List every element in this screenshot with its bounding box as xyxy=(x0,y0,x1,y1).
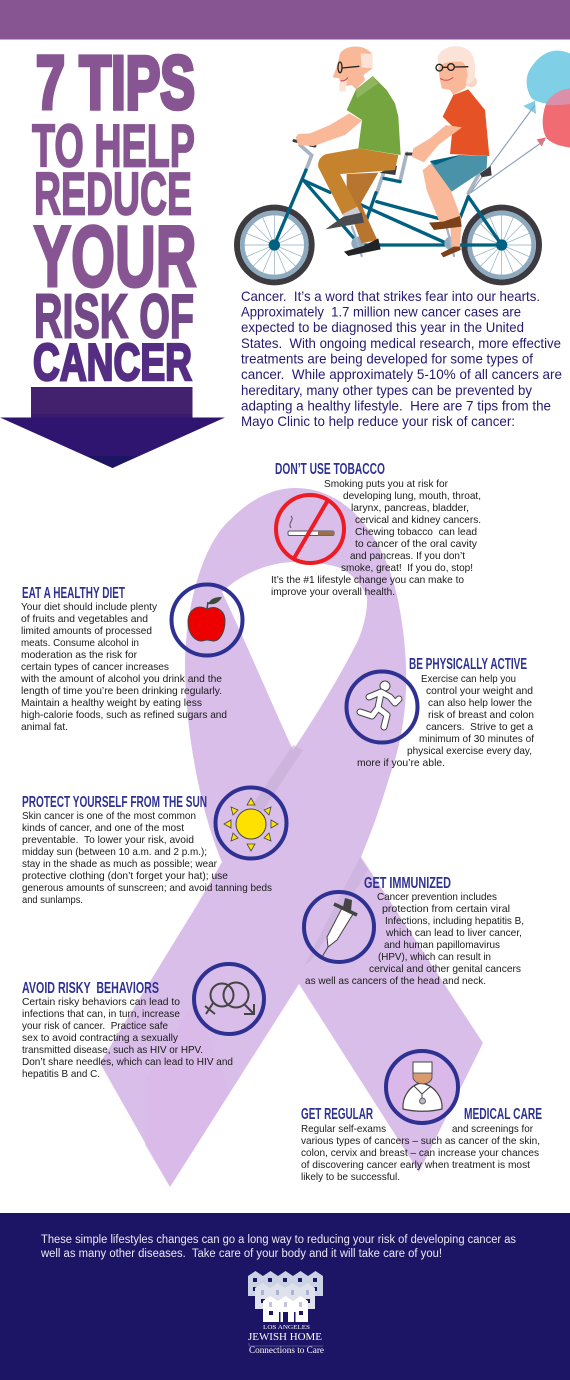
logo: Los Angeles Jewish Home xyxy=(248,1271,324,1355)
title block: TO HELP xyxy=(32,112,195,180)
title block: 7 TIPS xyxy=(36,40,195,124)
title block: YOUR xyxy=(34,209,196,305)
tip: be physically active: physical exercise every day, xyxy=(407,745,532,757)
illustration: couple on tandem bicycle with balloons xyxy=(237,46,570,282)
tip: protect yourself from the sun: stay in the shade as much as possible; wear xyxy=(22,858,217,870)
bicycle frame xyxy=(269,141,507,256)
tip: eat a healthy diet: Your diet should include plenty xyxy=(21,601,158,613)
icon: no smoking sign xyxy=(276,495,344,563)
awareness ribbon xyxy=(100,488,483,1187)
tip: protect yourself from the sun: preventable. To lower your risk, avoid xyxy=(22,834,194,846)
tip: don't use tobacco: and pancreas. If you don’t xyxy=(350,550,465,562)
woman rider xyxy=(412,46,489,257)
tip: be physically active: control your weight and xyxy=(426,685,533,697)
tip: don't use tobacco: developing lung, mouth, throat, xyxy=(343,490,481,502)
tip: be physically active: more if you’re able. xyxy=(357,757,445,769)
intro paragraph: hereditary, many other types can be prevented by xyxy=(241,382,532,398)
tip: protect yourself from the sun: kinds of cancer, and one of the most xyxy=(22,822,184,834)
tip: avoid risky behaviors: hepatitis B and C. xyxy=(22,1068,100,1080)
arrow pointing down xyxy=(0,387,225,468)
intro paragraph: Approximately 1.7 million new cancer cases are xyxy=(241,304,521,320)
wheels xyxy=(237,208,539,282)
tip: eat a healthy diet: high-calorie foods, such as refined sugars and xyxy=(21,709,227,721)
tip: get immunized: protection from certain viral xyxy=(382,903,510,915)
balloons xyxy=(470,51,570,193)
tip: avoid risky behaviors: AVOID RISKY BEHAVIORS xyxy=(22,980,159,997)
logo: Los Angeles Jewish Home: LOS ANGELES xyxy=(263,1324,310,1331)
tip: be physically active: risk of breast and colon xyxy=(428,709,534,721)
icon: apple xyxy=(172,584,242,656)
tip: get regular medical care: of discovering cancer early when treatment is most xyxy=(301,1159,530,1171)
icon: sun xyxy=(216,788,286,858)
tip: eat a healthy diet: EAT A HEALTHY DIET xyxy=(22,585,125,602)
tip: be physically active xyxy=(346,656,534,769)
footer message: These simple lifestyles changes can go a long way to reducing your risk of developing cancer as xyxy=(41,1234,516,1246)
tip: avoid risky behaviors: infections that can, in turn, increase xyxy=(22,1008,180,1020)
footer message xyxy=(40,1234,516,1260)
tip: eat a healthy diet xyxy=(20,584,243,733)
tip: get immunized: (HPV), which can result in xyxy=(378,951,491,963)
tip: get immunized: GET IMMUNIZED xyxy=(364,875,451,892)
logo: Los Angeles Jewish Home: Connections to Care xyxy=(249,1345,324,1355)
tip: get immunized: and human papillomavirus xyxy=(384,939,500,951)
tip: avoid risky behaviors: Certain risky behaviors can lead to xyxy=(22,996,180,1008)
tip: protect yourself from the sun: protective clothing (don’t forget your hat); use xyxy=(22,870,228,882)
icon: runner xyxy=(346,672,418,742)
tip: eat a healthy diet: with the amount of alcohol you drink and the xyxy=(20,673,222,685)
icon: gender symbols xyxy=(194,964,264,1034)
logo: Los Angeles Jewish Home: JEWISH HOME xyxy=(248,1332,322,1343)
tip: eat a healthy diet: of fruits and vegetables and xyxy=(21,613,148,625)
tip: get immunized: Infections, including hepatitis B, xyxy=(385,915,524,927)
intro paragraph: cancer. While approximately 5-10% of all cancers are xyxy=(241,366,562,382)
title block xyxy=(32,40,196,392)
tip: don't use tobacco: smoke, great! If you do, stop! xyxy=(341,562,473,574)
tip: avoid risky behaviors: transmitted disease, such as HIV or HPV. xyxy=(22,1044,203,1056)
title block: CANCER xyxy=(33,334,192,392)
tip: get regular medical care: likely to be successful. xyxy=(301,1171,400,1183)
tip: get regular medical care: Regular self-exams xyxy=(301,1123,386,1135)
tip: protect yourself from the sun: midday sun (between 10 a.m. and 2 p.m.); xyxy=(22,846,207,858)
tip: be physically active: cancers. Strive to get a xyxy=(426,721,533,733)
tip: eat a healthy diet: Maintain a healthy weight by eating less xyxy=(21,697,202,709)
tip: protect yourself from the sun: Skin cancer is one of the most common xyxy=(22,810,196,822)
tip: don't use tobacco: to cancer of the oral cavity xyxy=(355,538,478,550)
icon: doctor xyxy=(386,1051,458,1123)
tip: get immunized xyxy=(304,875,524,987)
tip: avoid risky behaviors xyxy=(22,964,264,1080)
intro paragraph: States. With ongoing medical research, more effective xyxy=(241,335,561,351)
tip: get immunized: Cancer prevention includes xyxy=(377,891,497,903)
tip: don't use tobacco: It’s the #1 lifestyle change you can make to xyxy=(271,574,464,586)
tip: eat a healthy diet: length of time you’re been drinking regularly. xyxy=(21,685,222,697)
tip: be physically active: Exercise can help you xyxy=(421,673,516,685)
tip: avoid risky behaviors: your risk of cancer. Practice safe xyxy=(22,1020,168,1032)
intro paragraph xyxy=(241,288,562,429)
tip: protect yourself from the sun xyxy=(22,788,286,906)
tip: get immunized: cervical and other genital cancers xyxy=(369,963,521,975)
footer message: well as many other diseases. Take care of your body and it will take care of you! xyxy=(40,1248,442,1260)
tip: don't use tobacco xyxy=(271,461,481,598)
tip: don't use tobacco: Smoking puts you at risk for xyxy=(324,478,448,490)
intro paragraph: adapting a healthy lifestyle. Here are 7 tips from the xyxy=(241,398,551,414)
icon: syringe xyxy=(304,892,374,962)
tip: eat a healthy diet: moderation as the risk for xyxy=(21,649,137,661)
tip: get immunized: as well as cancers of the head and neck. xyxy=(305,975,486,987)
tip: don't use tobacco: larynx, pancreas, bladder, xyxy=(351,502,469,514)
title block: REDUCE xyxy=(34,160,192,228)
intro paragraph: Mayo Clinic to help reduce your risk of cancer: xyxy=(241,413,515,429)
tip: protect yourself from the sun: generous amounts of sunscreen; and avoid tanning beds xyxy=(22,882,272,894)
tip: get regular medical care: and screenings for xyxy=(452,1123,533,1135)
footer band xyxy=(0,1213,570,1380)
tip: eat a healthy diet: certain types of cancer increases xyxy=(21,661,169,673)
tip: be physically active: minimum of 30 minutes of xyxy=(419,733,534,745)
tip: eat a healthy diet: animal fat. xyxy=(21,721,68,733)
tip: avoid risky behaviors: sex to avoid contracting a sexually xyxy=(22,1032,179,1044)
tip: don't use tobacco: DON’T USE TOBACCO xyxy=(275,461,385,478)
tip: get regular medical care xyxy=(301,1051,542,1183)
tip: get regular medical care: GET REGULAR xyxy=(301,1106,373,1123)
tip: get immunized: which can lead to liver cancer, xyxy=(385,927,522,939)
tip: don't use tobacco: Chewing tobacco can lead xyxy=(355,526,477,538)
tip: avoid risky behaviors: Don’t share needles, which can lead to HIV and xyxy=(22,1056,233,1068)
tip: be physically active: can also help lower the xyxy=(428,697,532,709)
man rider xyxy=(296,46,401,256)
tip: protect yourself from the sun: and sunlamps. xyxy=(22,894,83,906)
tip: eat a healthy diet: limited amounts of processed xyxy=(21,625,152,637)
tip: don't use tobacco: improve your overall health. xyxy=(271,586,395,598)
tip: get regular medical care: colon, cervix and breast – can increase your chances xyxy=(301,1147,539,1159)
intro paragraph: treatments are being developed for some types of xyxy=(241,350,533,366)
tip: get regular medical care: various types of cancers – such as cancer of the skin, xyxy=(301,1135,540,1147)
intro paragraph: expected to be diagnosed this year in the United xyxy=(241,319,524,335)
tip: protect yourself from the sun: PROTECT YOURSELF FROM THE SUN xyxy=(22,794,207,811)
tip: eat a healthy diet: meats. Consume alcohol in xyxy=(21,637,139,649)
tip: don't use tobacco: cervical and kidney cancers. xyxy=(355,514,481,526)
top banner xyxy=(0,0,570,40)
title block: RISK OF xyxy=(34,282,194,352)
intro paragraph: Cancer. It’s a word that strikes fear into our hearts. xyxy=(241,288,540,304)
